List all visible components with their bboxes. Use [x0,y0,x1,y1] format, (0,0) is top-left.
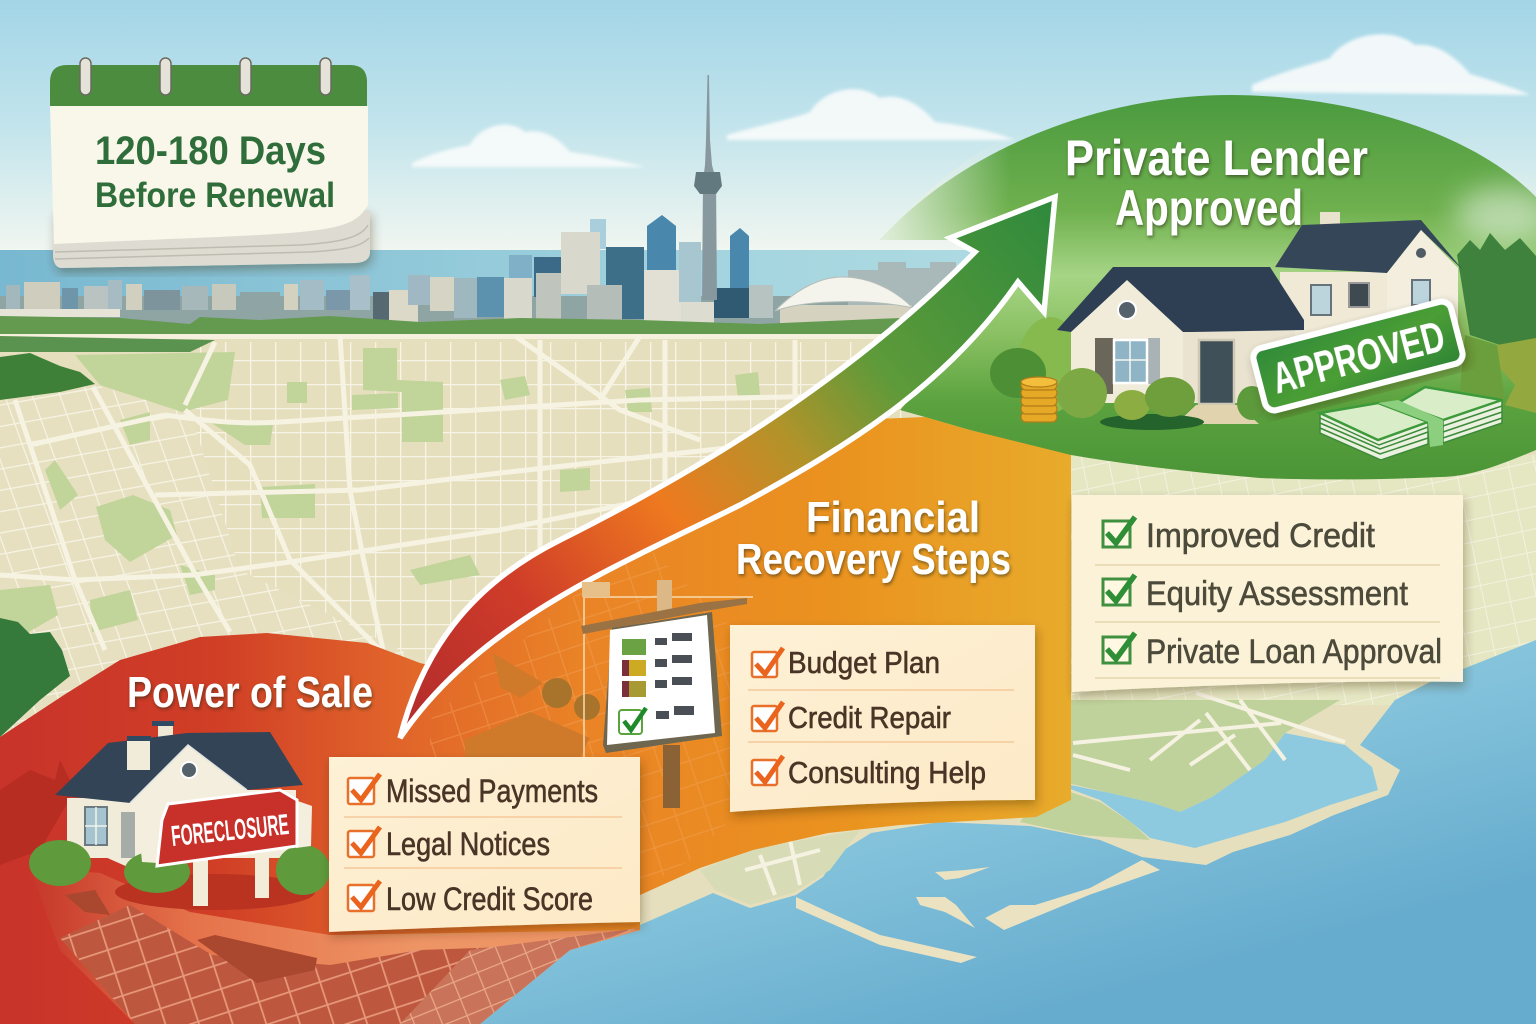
money band [1378,400,1443,447]
panel: approval checklist [1072,495,1463,692]
map main roads [0,336,880,660]
checklist text: Improved Credit [1146,517,1376,555]
city skyline [0,75,960,325]
toronto islands [796,860,1160,963]
growth arrow [400,197,1055,738]
approved badge: APPROVED [1267,312,1450,403]
map parks [0,348,845,640]
pale haze on right of hill [1455,187,1536,243]
green hill [880,95,1536,479]
shrubs [1057,368,1267,430]
forests at map edges [0,336,215,737]
green tree band below skyline [0,316,960,338]
orange street overlay [430,540,730,890]
CN tower [694,75,722,300]
calendar text: 120-180 Days [95,129,326,173]
heading: private lender approved: Approved [1115,180,1303,236]
lakeshore streets [745,693,1345,895]
calendar text: Before Renewal [95,176,335,215]
back house [1275,212,1463,342]
water [480,640,1536,1024]
checklist text: Low Credit Score [386,881,593,917]
checklist text: Private Loan Approval [1146,633,1442,671]
heading: financial recovery steps: Recovery Steps [736,535,1011,584]
clouds [412,34,1530,167]
checklist text [1146,517,1442,671]
panel: recovery steps checklist [730,625,1035,812]
heading: financial recovery steps [736,493,1011,584]
check icons [752,648,783,785]
checklist text: Consulting Help [788,755,986,790]
checklist text [788,645,986,790]
left stack [1320,403,1428,460]
salmon street area [30,868,640,1024]
trees behind approved house [1457,233,1536,413]
heading: private lender approved [1065,130,1368,236]
red to orange journey region [0,417,1071,1024]
map top road [0,334,960,339]
heading: financial recovery steps: Financial [806,493,980,542]
checklist text: Missed Payments [386,773,598,809]
check icons [1103,517,1135,663]
stadium dome [775,277,913,325]
darker trees behind red house [0,760,75,865]
calendar text [95,129,335,215]
cash stacks [1320,387,1502,460]
foreclosure house [29,721,330,910]
calendar card [50,58,370,268]
gold coins [1021,377,1057,422]
approved houses [1057,212,1463,430]
hill haze on left edge [880,135,1010,240]
bushes behind approved house [990,317,1082,413]
panel: warning signs checklist [329,757,640,932]
chimneys [152,721,174,740]
checklist text: Credit Repair [788,700,951,735]
calendar rings [80,58,331,95]
heading: power of sale: Power of Sale [127,668,373,717]
checklist text: Equity Assessment [1146,575,1408,613]
lake on the horizon [0,250,1536,310]
checklist text: Budget Plan [788,645,940,680]
board rows [619,633,694,734]
sky background [0,0,1536,252]
front house [1057,267,1304,424]
sign posts [193,853,269,906]
checklist text [386,773,598,917]
map street grids [0,342,1536,760]
right stack [1398,387,1502,443]
lakeshore land [700,693,1378,905]
check icons [348,774,380,911]
foreclosure banner [138,790,312,866]
foreclosure banner: FORECLOSURE [170,809,290,853]
checklist signboard [581,580,753,808]
checklist text: Legal Notices [386,826,550,862]
city map base [0,336,1536,1024]
shrubs [29,840,330,895]
heading: private lender approved: Private Lender [1065,130,1368,186]
approved badge [1251,299,1465,413]
orange parks and trees [465,653,600,757]
